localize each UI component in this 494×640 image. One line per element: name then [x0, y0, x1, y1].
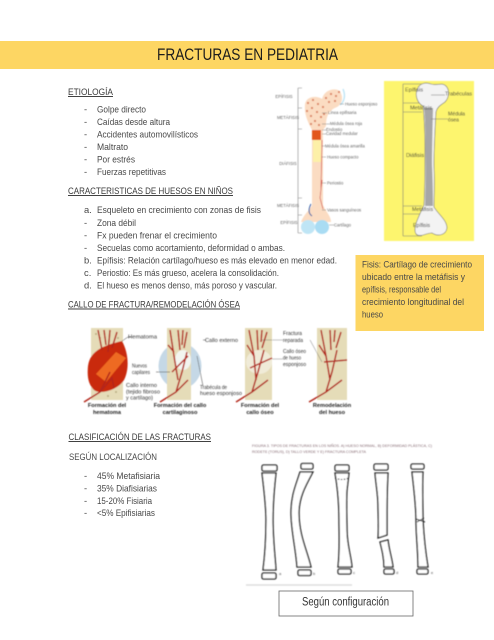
anatomical bone diagram: DIÁFISIS — [279, 161, 297, 166]
box: según configuración — [279, 591, 413, 616]
anatomical bone diagram: Hueso esponjoso — [345, 102, 378, 106]
list: localización: - — [84, 495, 87, 506]
stage 1: hematoma: Formación del — [88, 403, 127, 409]
stage 2: soft callus: cartilaginoso — [163, 410, 198, 416]
labelled femur diagram on yellow panel — [384, 81, 474, 241]
anatomical bone diagram: Cartílago — [334, 222, 352, 228]
stage 2: soft callus: Nuevos — [132, 364, 147, 370]
stage 2: soft callus: hueso esponjoso — [200, 391, 242, 397]
title banner — [0, 41, 494, 69]
list: etiología: Fuerzas repetitivas — [97, 166, 166, 177]
list: características: Periostio: Es más grueso, acelera la consolidación. — [97, 267, 279, 278]
bone c: torus: c — [353, 570, 355, 575]
list: localización: - — [84, 482, 87, 494]
title banner: FRACTURAS EN PEDIATRIA — [157, 45, 339, 64]
list: características: - — [84, 217, 87, 228]
list: características: b. — [84, 254, 92, 266]
anatomical bone diagram: Médula ósea amarilla — [325, 144, 365, 148]
anatomical bone diagram: EPÍFISIS — [280, 220, 298, 225]
list: características: Esqueleto en crecimiento con zonas de fisis — [97, 204, 261, 215]
stage 2: soft callus: Trabécula de — [200, 385, 227, 391]
list: características: d. — [84, 280, 92, 290]
stage 3: bony callus: Callo óseo — [283, 349, 306, 355]
list: características: Fx pueden frenar el crecimiento — [97, 230, 217, 240]
anatomical bone diagram: METÁFISIS — [277, 203, 299, 208]
callout: fisis: epífisis, responsable del — [362, 284, 441, 294]
list: etiología: Por estrés — [97, 154, 135, 164]
figure caption: FIGURA 3. TIPOS DE FRACTURAS EN LOS NIÑOS. A) HUESO NORMAL, B) DEFORMIDAD PLÁSTICA, C) — [252, 443, 433, 448]
figure caption: RODETE (TORUS), D) TALLO VERDE Y E) FRACTURA COMPLETA — [252, 449, 366, 454]
callout: fisis: Fisis: Cartílago de crecimiento — [362, 258, 472, 270]
anatomical bone diagram: Vasos sanguíneos — [327, 208, 361, 212]
labelled femur diagram on yellow panel: Epífisis — [405, 88, 423, 94]
list: etiología: Golpe directo — [97, 104, 146, 114]
list: etiología: - — [84, 116, 87, 127]
stage 1: hematoma: Hematoma — [128, 334, 157, 340]
anatomical bone diagram: Línea epifisaria — [328, 110, 357, 115]
figure: fracture types in children — [246, 443, 434, 585]
heading: clasificación: CLASIFICACIÓN DE LAS FRACTURAS — [68, 432, 211, 443]
list: localización: - — [84, 507, 87, 518]
list: etiología: Caídas desde altura — [97, 116, 171, 127]
stage 3: bony callus: esponjoso — [283, 362, 306, 368]
list: características: Secuelas como acortamiento, deformidad o ambas. — [97, 242, 285, 253]
bone a: normal: a — [279, 571, 282, 576]
stage 3: bony callus: Formación del — [241, 403, 280, 409]
list: características: El hueso es menos denso, más poroso y vascular. — [97, 280, 277, 290]
anatomical bone diagram: EPÍFISIS — [275, 94, 293, 99]
callout: fisis: ubicado entre la metáfisis y — [362, 271, 465, 282]
labelled femur diagram on yellow panel: ósea — [448, 118, 459, 124]
bone d: greenstick — [374, 464, 398, 575]
stage 4: remodelling — [309, 328, 352, 416]
stage 2: soft callus: capilares — [132, 370, 150, 376]
list: localización: <5% Epifisiarias — [97, 507, 155, 518]
bone e: complete — [411, 464, 434, 575]
list: etiología: - — [84, 104, 87, 114]
bone c: torus — [335, 465, 355, 575]
bone d: greenstick: d — [396, 570, 398, 575]
stage 4: remodelling: Remodelación — [313, 403, 352, 409]
box: según configuración: Según configuración — [302, 596, 389, 608]
list: características: - — [84, 230, 87, 240]
bone a: normal — [262, 465, 282, 579]
list: localización: 45% Metafisiaria — [97, 470, 161, 481]
stage 4: remodelling: del hueso — [319, 410, 346, 416]
heading: callo de fractura: CALLO DE FRACTURA/REMODELACIÓN ÓSEA — [68, 300, 240, 310]
labelled femur diagram on yellow panel: Epífisis — [413, 223, 430, 229]
anatomical bone diagram: METÁFISIS — [277, 115, 299, 120]
bone b: plastic deformation — [291, 464, 316, 576]
stage 2: soft callus: y cartílago) — [126, 396, 153, 402]
stage 1: hematoma — [84, 328, 157, 416]
stage 3: bony callus: callo óseo — [246, 410, 274, 416]
labelled femur diagram on yellow panel: Metáfisis — [412, 207, 433, 213]
stage 3: bony callus: de hueso — [283, 356, 301, 362]
list: características — [84, 204, 337, 290]
list: localización — [84, 470, 161, 518]
anatomical bone diagram — [275, 88, 378, 234]
heading: etiología: ETIOLOGÍA — [68, 87, 114, 98]
list: etiología — [84, 104, 198, 177]
stage 3: bony callus: Fractura — [283, 331, 302, 337]
callout: fisis: hueso — [362, 308, 383, 320]
heading: características: CARACTERISTICAS DE HUESOS EN NIÑOS — [68, 186, 233, 197]
list: etiología: Maltrato — [97, 141, 128, 152]
anatomical bone diagram: Médula ósea roja — [330, 121, 363, 126]
list: localización: 35% Diafisiarias — [97, 482, 157, 494]
stage 3: bony callus: reparada — [283, 338, 303, 344]
list: características: - — [84, 242, 87, 253]
callout: fisis: crecimiento longitudinal del — [362, 296, 464, 307]
list: características: Epífisis: Relación cartílago/hueso es más elevado en menor edad. — [97, 254, 337, 266]
list: características: Zona débil — [97, 217, 136, 228]
list: características: c. — [84, 267, 91, 278]
stage 2: soft callus: Formación del callo — [154, 403, 207, 409]
figure caption — [252, 443, 433, 454]
list: etiología: - — [84, 128, 87, 140]
fracture healing stages diagram — [84, 328, 352, 416]
anatomical bone diagram: Hueso compacto — [327, 154, 359, 160]
bone e: complete: e — [431, 570, 434, 575]
stage 2: soft callus: Callo interno — [126, 383, 157, 389]
labelled femur diagram on yellow panel: Trabéculas — [445, 92, 472, 98]
stage 2: soft callus — [126, 328, 242, 416]
subheading: según localización: SEGÚN LOCALIZACIÓN — [69, 451, 157, 462]
labelled femur diagram on yellow panel: Diáfisis — [406, 153, 424, 159]
anatomical bone diagram: Endostio — [326, 127, 343, 132]
list: etiología: Accidentes automovilísticos — [97, 128, 198, 140]
stage 2: soft callus: (tejido fibroso — [126, 390, 160, 396]
anatomical bone diagram: Periostio — [327, 180, 344, 186]
list: localización: 15-20% Fisiaria — [97, 495, 153, 506]
stage 3: bony callus — [236, 328, 306, 416]
list: etiología: - — [84, 141, 87, 152]
labelled femur diagram on yellow panel: Metáfisis — [410, 106, 432, 112]
anatomical bone diagram: Cavidad medular — [326, 131, 358, 136]
list: etiología: - — [84, 166, 87, 177]
labelled femur diagram on yellow panel: Médula — [448, 112, 465, 118]
list: etiología: - — [84, 154, 87, 164]
list: características: a. — [84, 204, 92, 215]
bone b: plastic deformation: b — [313, 571, 316, 576]
callout: fisis — [356, 255, 484, 331]
stage 1: hematoma: hematoma — [93, 410, 122, 416]
stage 2: soft callus: Callo externo — [205, 338, 238, 344]
list: localización: - — [84, 470, 87, 481]
